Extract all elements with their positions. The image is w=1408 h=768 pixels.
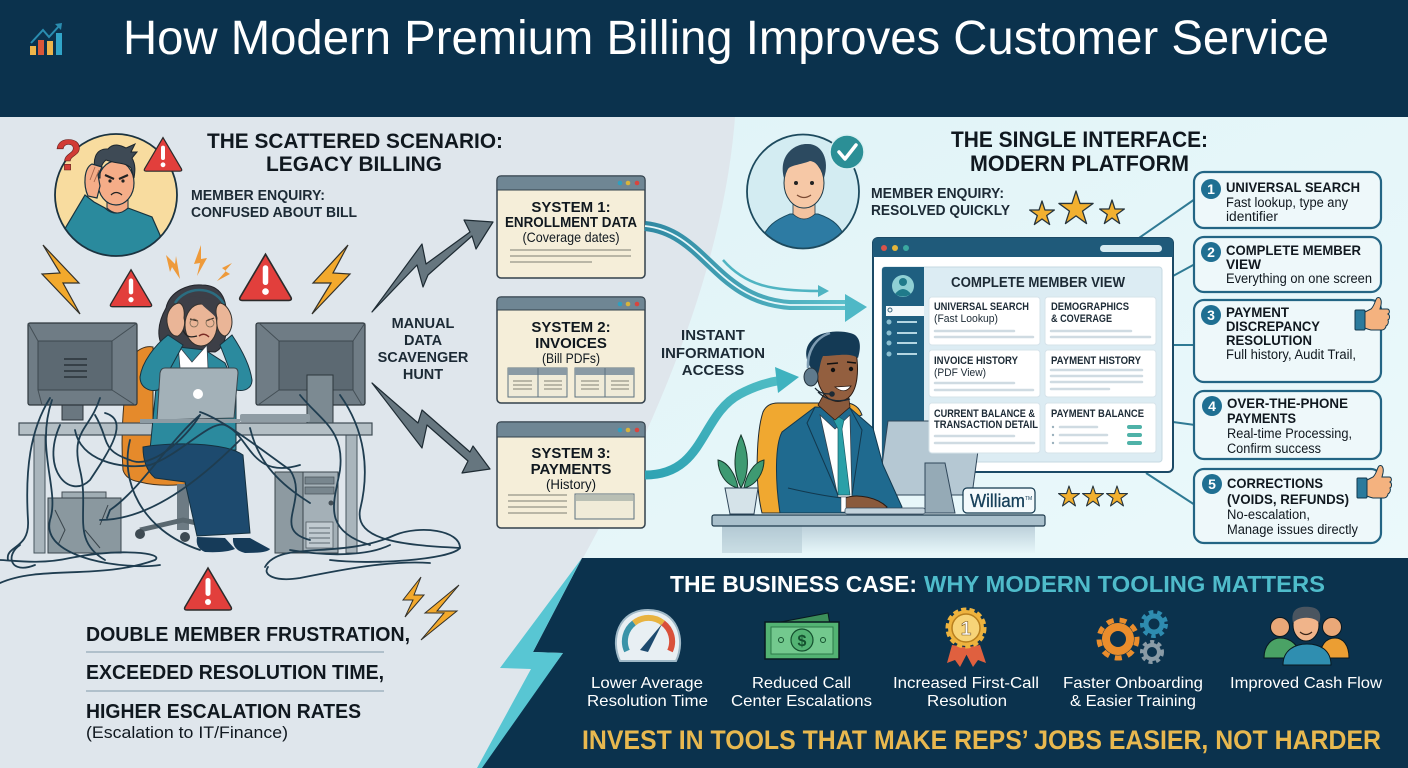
- computer tower right: [275, 472, 338, 553]
- legs: [143, 444, 250, 536]
- callout 3: payment discrepancy resolution: 3: [1207, 307, 1215, 323]
- window: system 3: SYSTEM 3:: [531, 445, 611, 462]
- label: instant information access: INSTANT: [681, 327, 745, 344]
- laptop: [140, 368, 240, 423]
- arrow: zigzag up to system 1: [372, 220, 493, 312]
- plant: [718, 435, 764, 514]
- monitor right: [256, 323, 365, 423]
- panel: legacy billing: [0, 130, 645, 742]
- keyboard: [845, 508, 925, 514]
- callout 1: universal search: identifier: [1226, 209, 1279, 224]
- header band: [0, 0, 1408, 117]
- callout 3: payment discrepancy resolution: RESOLUTION: [1226, 332, 1312, 348]
- icon: bottom bolts: [403, 577, 459, 640]
- heading: scattered scenario: [207, 130, 503, 176]
- window: system 2: SYSTEM 2:: [531, 319, 611, 336]
- callout 5: corrections: No-escalation,: [1227, 507, 1310, 522]
- icon: confused member: [55, 131, 182, 262]
- label: instant information access: ACCESS: [682, 362, 744, 379]
- icon: warning bottom: [185, 568, 231, 610]
- callout 4: over-the-phone payments: 4: [1208, 398, 1216, 414]
- chair: [757, 403, 862, 513]
- icon: cash: $: [798, 633, 807, 650]
- benefit: reduced escalations: Reduced Call: [752, 675, 851, 692]
- benefit: improved cash flow: Improved Cash Flow: [1230, 675, 1382, 692]
- window: system 2: (Bill PDFs): [542, 350, 600, 366]
- panel: business case: [477, 558, 1408, 768]
- icon: stress sparks: [166, 245, 232, 281]
- icon: medal: [947, 610, 986, 667]
- icon: warning: [144, 138, 182, 171]
- arrow: zigzag down to system 3: [372, 383, 490, 473]
- card: demographics: [1045, 297, 1156, 345]
- benefit: faster onboarding: Faster Onboarding: [1063, 675, 1203, 692]
- heading: scattered scenario: THE SCATTERED SCENARIO:: [207, 130, 503, 153]
- impact: double frustration: [86, 568, 459, 742]
- callout 3: payment discrepancy resolution: Full history, Audit Trail,: [1226, 347, 1356, 362]
- callout 5: corrections: CORRECTIONS: [1227, 475, 1323, 491]
- manual data scavenger hunt label: DATA: [404, 333, 443, 349]
- callout 2: complete member view: Everything on one screen: [1226, 271, 1372, 286]
- member enquiry: confused: [191, 188, 357, 221]
- card: current balance: CURRENT BALANCE &: [934, 408, 1035, 420]
- card: universal search: [929, 297, 1040, 345]
- icon: lightning right: [312, 245, 350, 314]
- desk: [712, 515, 1045, 553]
- browser window frame: [873, 238, 1173, 472]
- icon: lightning left: [42, 245, 80, 314]
- member enquiry: resolved: MEMBER ENQUIRY:: [871, 186, 1004, 202]
- face: [185, 304, 217, 346]
- benefit: lower average resolution time: Resolution Time: [587, 693, 708, 710]
- window: system 3: (History): [546, 476, 596, 492]
- name tag: William: William: [970, 491, 1025, 511]
- title: How Modern Premium Billing Improves Customer Service: [123, 12, 1329, 65]
- name tag: William: [963, 488, 1035, 513]
- hair: [159, 285, 227, 352]
- desk: [19, 414, 372, 553]
- window: system 2: [497, 297, 645, 403]
- icon: thumbs up: [1357, 465, 1392, 498]
- callout 2: complete member view: 2: [1207, 244, 1215, 260]
- icon: happy member: [747, 134, 864, 250]
- impact text: [86, 624, 410, 742]
- card: current balance: [929, 403, 1040, 453]
- invoice tables: [508, 368, 634, 397]
- callout 4: over-the-phone payments: Confirm success: [1227, 441, 1321, 456]
- panel: modern platform: [712, 127, 1392, 553]
- manual data scavenger hunt label: SCAVENGER: [378, 350, 469, 366]
- benefit: reduced escalations: [731, 675, 872, 710]
- heading: single interface: [951, 127, 1208, 176]
- member enquiry: resolved: [871, 186, 1010, 219]
- icon: gauge: [616, 610, 680, 661]
- window: system 2: INVOICES: [535, 335, 607, 352]
- computer tower left: [48, 492, 121, 553]
- business case heading: WHY MODERN TOOLING MATTERS: [924, 571, 1325, 597]
- benefit: first-call resolution: Resolution: [927, 693, 1007, 710]
- tangled cables: [0, 395, 460, 583]
- monitor left: [28, 323, 137, 420]
- member enquiry: resolved: RESOLVED QUICKLY: [871, 203, 1010, 219]
- connector lines: [1139, 199, 1195, 505]
- hands: [167, 303, 185, 336]
- callout 5: corrections: (VOIDS, REFUNDS): [1227, 491, 1349, 507]
- arrow: system 3 to agent: [645, 367, 799, 475]
- impact text: EXCEEDED RESOLUTION TIME,: [86, 662, 384, 684]
- callout 5: corrections: 5: [1208, 476, 1216, 492]
- icon: medal: 1: [961, 619, 972, 640]
- benefit: lower average resolution time: [587, 675, 708, 710]
- card: demographics: & COVERAGE: [1051, 313, 1112, 325]
- icon: warning large: [240, 254, 291, 300]
- callout 1: universal search: [1194, 172, 1381, 228]
- callout 2: complete member view: COMPLETE MEMBER: [1226, 242, 1361, 258]
- callout 3: payment discrepancy resolution: PAYMENT: [1226, 304, 1289, 320]
- card: universal search: UNIVERSAL SEARCH: [934, 301, 1029, 313]
- impact text: (Escalation to IT/Finance): [86, 723, 288, 742]
- sidebar: [886, 275, 924, 356]
- callout 4: over-the-phone payments: Real-time Processing,: [1227, 426, 1352, 441]
- card: universal search: (Fast Lookup): [934, 313, 998, 325]
- icon: thumbs up: [1355, 297, 1390, 330]
- card: invoice history: INVOICE HISTORY: [934, 355, 1019, 367]
- monitor: [878, 421, 982, 513]
- card: invoice history: (PDF View): [934, 367, 986, 379]
- card: payment history: PAYMENT HISTORY: [1051, 355, 1142, 367]
- callout 4: over-the-phone payments: OVER-THE-PHONE: [1227, 395, 1348, 411]
- arrows: data flowing to modern platform: [645, 226, 867, 322]
- callout 5: corrections: [1194, 465, 1392, 543]
- benefit: first-call resolution: [893, 675, 1039, 710]
- window: system 3: PAYMENTS: [531, 461, 611, 478]
- benefit: faster onboarding: & Easier Training: [1070, 693, 1196, 710]
- icon: warning small: [110, 270, 152, 307]
- agent head: [804, 331, 860, 420]
- label: instant information access: [661, 327, 765, 379]
- icon: team: [1264, 607, 1349, 665]
- icon: gears: [1099, 612, 1166, 662]
- jacket: [150, 347, 236, 450]
- callout 1: universal search: 1: [1207, 181, 1215, 197]
- benefit: reduced escalations: Center Escalations: [731, 693, 872, 710]
- card: payment balance: [1045, 403, 1156, 453]
- chair: [122, 347, 230, 542]
- icon: growth chart: [30, 23, 62, 55]
- callout 1: universal search: UNIVERSAL SEARCH: [1226, 179, 1360, 195]
- callout 3: payment discrepancy resolution: [1194, 297, 1390, 382]
- member enquiry: confused: MEMBER ENQUIRY:: [191, 188, 325, 204]
- benefit: faster onboarding: [1063, 675, 1203, 710]
- callout 4: over-the-phone payments: [1194, 391, 1381, 459]
- agent: frustrated woman: [140, 285, 270, 553]
- heading: single interface: MODERN PLATFORM: [970, 151, 1189, 176]
- benefit: first-call resolution: Increased First-Call: [893, 675, 1039, 692]
- manual data scavenger hunt label: HUNT: [403, 367, 443, 383]
- window: system 3: [497, 422, 645, 528]
- window: system 1: ENROLLMENT DATA: [505, 214, 637, 231]
- card: payment history: [1045, 350, 1156, 397]
- name tag: William: TM: [1025, 496, 1032, 502]
- illustration: happy agent: [712, 331, 1127, 553]
- callout 3: payment discrepancy resolution: DISCREPANCY: [1226, 318, 1321, 334]
- callout 1: universal search: Fast lookup, type any: [1226, 195, 1348, 210]
- label: instant information access: INFORMATION: [661, 345, 765, 362]
- impact text: DOUBLE MEMBER FRUSTRATION,: [86, 624, 410, 646]
- card: current balance: TRANSACTION DETAIL: [934, 419, 1038, 431]
- manual data scavenger hunt label: [378, 316, 469, 383]
- icon: question mark: ?: [55, 131, 82, 180]
- icon: check badge: [830, 135, 864, 169]
- member view cards: [929, 297, 1156, 453]
- window: system 1: (Coverage dates): [522, 229, 620, 245]
- background: modern side: [583, 117, 1408, 558]
- member enquiry: confused: CONFUSED ABOUT BILL: [191, 205, 357, 221]
- business case heading: THE BUSINESS CASE:: [670, 571, 917, 597]
- benefit: lower average resolution time: Lower Average: [591, 675, 703, 692]
- card: invoice history: [929, 350, 1040, 397]
- heading: single interface: THE SINGLE INTERFACE:: [951, 127, 1208, 152]
- card: payment balance: PAYMENT BALANCE: [1051, 408, 1144, 420]
- window: system 1: SYSTEM 1:: [531, 199, 611, 216]
- agent body: [776, 407, 902, 513]
- view title: COMPLETE MEMBER VIEW: [951, 275, 1125, 291]
- illustration: stressed agent at desk: [0, 285, 460, 583]
- callout 4: over-the-phone payments: PAYMENTS: [1227, 410, 1296, 426]
- decorative lightning edge: [477, 558, 582, 768]
- heading: scattered scenario: LEGACY BILLING: [266, 153, 442, 176]
- card: demographics: DEMOGRAPHICS: [1051, 301, 1129, 313]
- manual data scavenger hunt label: MANUAL: [392, 316, 455, 332]
- callout 2: complete member view: VIEW: [1226, 256, 1262, 272]
- icon: three stars: [1030, 191, 1124, 225]
- icon: lower stars: [1059, 486, 1127, 506]
- impact text: HIGHER ESCALATION RATES: [86, 701, 361, 723]
- icon: cash: [765, 613, 839, 659]
- callout 5: corrections: Manage issues directly: [1227, 522, 1358, 537]
- window: system 1: [497, 176, 645, 278]
- callout 2: complete member view: [1194, 237, 1381, 292]
- business case heading: [670, 571, 1325, 597]
